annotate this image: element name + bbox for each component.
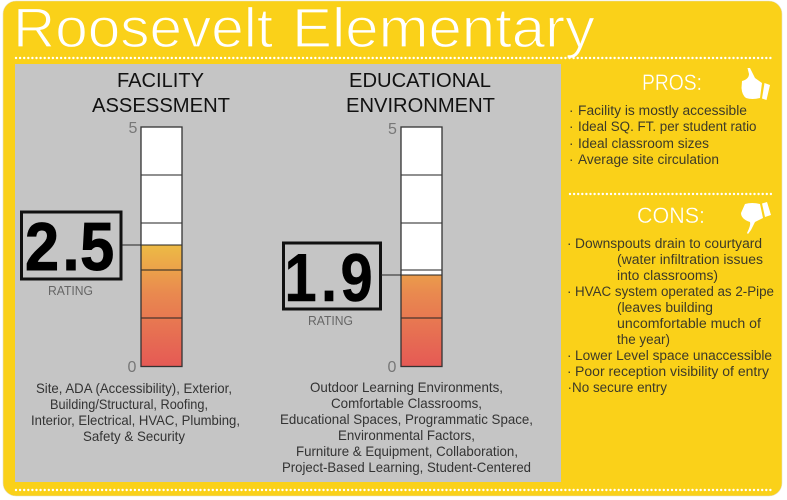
callout: educational rating 1.9: RATING — [308, 313, 353, 328]
callout: facility rating 2.5: RATING — [48, 283, 93, 298]
text: facility criteria: Interior, Electrical, HVAC, Plumbing, — [31, 412, 240, 428]
heading: facility assessment — [92, 69, 230, 117]
list: cons: the year) — [617, 332, 670, 347]
list: pros: · — [569, 136, 574, 151]
pros/cons dotted divider — [570, 193, 772, 195]
text: educational criteria: Outdoor Learning Environments, — [310, 379, 503, 395]
panel: educational environment — [280, 69, 533, 475]
heading: pros: PROS: — [642, 70, 702, 95]
callout: facility rating 2.5: 2.5 — [25, 208, 114, 285]
heading: facility assessment: ASSESSMENT — [92, 94, 230, 117]
list: cons: · — [567, 284, 572, 299]
callout: educational rating 1.9 — [284, 241, 401, 328]
list: cons: Downspouts drain to courtyard — [575, 236, 762, 251]
gauge: educational rating bar — [388, 121, 442, 376]
list: cons: · — [567, 364, 572, 379]
panel: cons — [567, 202, 774, 395]
icon: thumbs up — [742, 68, 770, 100]
list: cons: uncomfortable much of — [617, 316, 761, 331]
gauge: facility rating bar — [128, 120, 182, 376]
list: cons: HVAC system operated as 2-Pipe — [575, 284, 774, 299]
gauge: facility rating bar: 5 — [128, 120, 138, 137]
text: facility criteria — [31, 380, 240, 444]
heading: facility assessment: FACILITY — [117, 69, 204, 92]
gauge: educational rating bar: 0 — [388, 359, 396, 376]
list: pros: · — [569, 119, 574, 134]
list: pros — [569, 103, 756, 167]
list: cons — [567, 236, 774, 395]
top dotted divider — [16, 57, 772, 59]
list: cons: (leaves building — [617, 300, 713, 315]
list: pros: · — [569, 152, 574, 167]
text: educational criteria: Comfortable Classrooms, — [331, 395, 482, 411]
panel: gray ratings area — [15, 64, 561, 482]
list: cons: into classrooms) — [617, 268, 718, 283]
text: educational criteria: Project-Based Learning, Student-Centered — [282, 459, 531, 475]
gauge: facility rating bar: 0 — [128, 359, 136, 376]
callout: facility rating 2.5 — [22, 208, 141, 298]
title — [13, 0, 595, 59]
text: educational criteria — [280, 379, 533, 475]
heading: educational environment — [346, 69, 495, 117]
callout: educational rating 1.9: 1.9 — [284, 241, 373, 316]
text: educational criteria: Environmental Factors, — [338, 427, 475, 443]
list: cons: (water infiltration issues — [617, 252, 763, 267]
heading: cons: CONS: — [637, 203, 705, 228]
list: cons: Poor reception visibility of entry — [575, 364, 769, 379]
list: pros: Ideal classroom sizes — [578, 136, 709, 151]
heading: educational environment: ENVIRONMENT — [346, 94, 495, 117]
text: educational criteria: Educational Spaces, Programmatic Space, — [280, 411, 533, 427]
list: pros: Ideal SQ. FT. per student ratio — [578, 119, 756, 134]
list: cons: No secure entry — [572, 380, 667, 395]
text: facility criteria: Site, ADA (Accessibility), Exterior, — [36, 380, 232, 396]
list: pros: Average site circulation — [578, 152, 719, 167]
heading: educational environment: EDUCATIONAL — [349, 69, 491, 92]
panel: pros — [569, 68, 770, 167]
list: pros: Facility is mostly accessible — [578, 103, 747, 118]
text: educational criteria: Furniture & Equipment, Collaboration, — [296, 443, 518, 459]
bottom dotted divider — [16, 489, 772, 491]
text: facility criteria: Safety & Security — [83, 428, 185, 444]
list: cons: · — [567, 236, 572, 251]
list: cons: · — [568, 380, 572, 395]
text: facility criteria: Building/Structural, Roofing, — [50, 396, 208, 412]
gauge: educational rating bar: 5 — [388, 121, 397, 138]
list: cons: · — [567, 348, 572, 363]
icon: thumbs down — [741, 202, 771, 234]
list: pros: · — [569, 103, 574, 118]
list: cons: Lower Level space unaccessible — [575, 348, 772, 363]
panel: facility assessment — [22, 69, 240, 444]
